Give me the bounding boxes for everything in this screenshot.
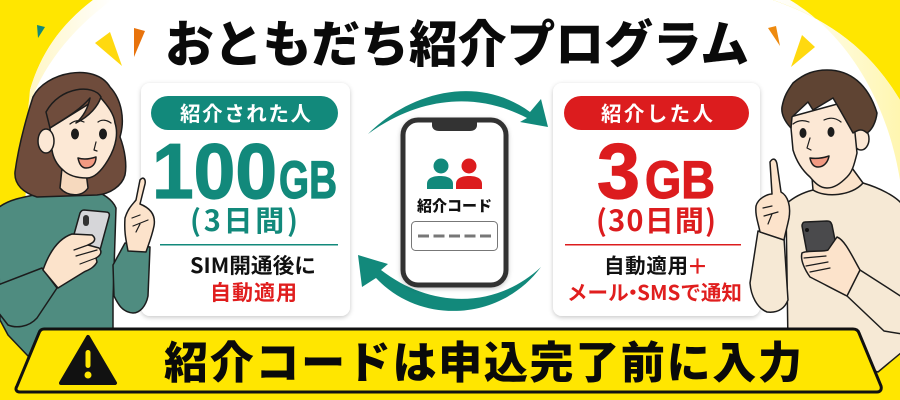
man hand bbox=[802, 237, 860, 296]
note line 1: 自動適用 bbox=[604, 249, 688, 279]
man forearm sleeve bbox=[846, 270, 900, 334]
man hair bbox=[782, 70, 877, 133]
panel: referrer bbox=[553, 83, 760, 316]
woman mouth bbox=[78, 157, 96, 168]
woman sweater bbox=[0, 188, 116, 356]
banner shape bbox=[16, 329, 881, 392]
man mouth bbox=[810, 156, 829, 167]
card bbox=[141, 83, 350, 316]
code input bbox=[412, 222, 498, 250]
badge bbox=[151, 96, 338, 130]
title: おともだち紹介プログラム bbox=[165, 5, 749, 77]
woman phone bbox=[73, 210, 109, 250]
duration: (3日間) bbox=[190, 198, 298, 240]
note line 2: 自動適用 bbox=[210, 277, 297, 307]
data amount: 100 bbox=[152, 127, 277, 215]
woman left sleeve bbox=[0, 268, 57, 327]
man pointing hand bbox=[756, 159, 790, 240]
woman hand bbox=[43, 234, 101, 288]
unit GB: GB bbox=[279, 151, 337, 210]
phone bbox=[403, 120, 506, 285]
badge label: 紹介された人 bbox=[180, 97, 312, 127]
woman bangs bbox=[46, 89, 101, 128]
note line 2: メール・SMSで通知 bbox=[567, 276, 742, 306]
icon: warning triangle bbox=[61, 337, 115, 383]
duration: (30日間) bbox=[596, 198, 716, 240]
note line 1: SIM開通後に bbox=[190, 250, 316, 280]
card bbox=[553, 83, 760, 316]
arrow: bottom, right to left bbox=[358, 255, 541, 311]
unit GB: GB bbox=[645, 151, 715, 210]
data amount: 3 bbox=[597, 127, 640, 215]
panel: referred person bbox=[141, 83, 350, 316]
badge label: 紹介した人 bbox=[601, 97, 714, 127]
woman neck bbox=[60, 168, 88, 195]
arrow: top, left to right bbox=[368, 91, 548, 134]
man face bbox=[790, 100, 857, 188]
man eyes bbox=[800, 128, 806, 138]
woman eyes bbox=[71, 128, 79, 140]
man illustration bbox=[750, 70, 900, 372]
phone label: 紹介コード bbox=[417, 195, 492, 216]
icon: red person bbox=[456, 158, 482, 189]
woman hair back bbox=[15, 73, 126, 197]
woman illustration bbox=[0, 73, 154, 356]
man neck bbox=[812, 168, 863, 195]
phone body bbox=[403, 120, 506, 285]
divider bbox=[565, 244, 741, 246]
man phone bbox=[802, 221, 837, 258]
divider bbox=[160, 244, 338, 246]
badge bbox=[564, 96, 749, 130]
woman right sleeve bbox=[113, 243, 150, 313]
banner text: 紹介コードは申込完了前に入力 bbox=[164, 327, 802, 391]
woman face bbox=[50, 97, 117, 178]
woman ear bbox=[38, 129, 54, 153]
man ear bbox=[853, 128, 869, 150]
notch bbox=[432, 120, 477, 131]
woman pointing hand bbox=[125, 178, 154, 252]
confetti bbox=[37, 25, 815, 67]
plus sign: ＋ bbox=[687, 251, 708, 281]
man sweater bbox=[786, 183, 900, 372]
banner bbox=[16, 327, 881, 392]
man left sleeve bbox=[750, 231, 788, 312]
icon: teal person bbox=[427, 158, 453, 189]
